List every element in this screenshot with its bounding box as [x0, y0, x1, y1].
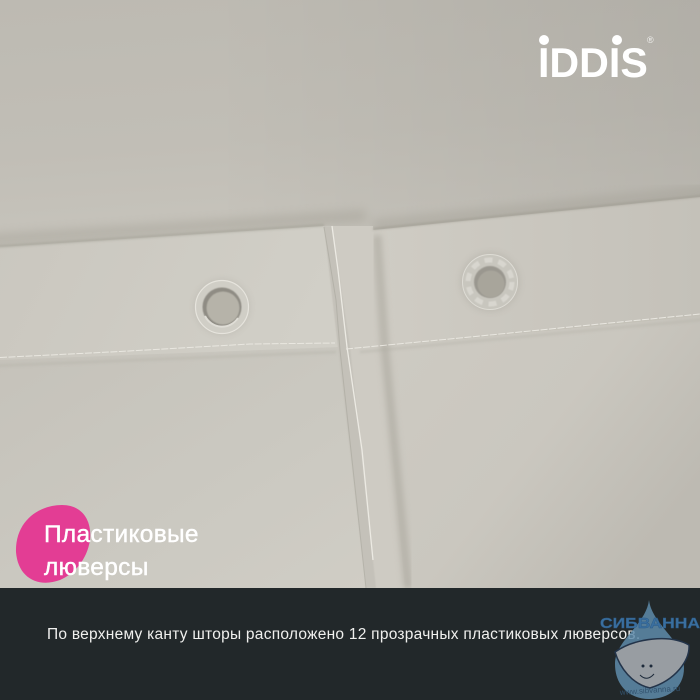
bathtub	[615, 639, 689, 688]
vertical hem strip	[324, 226, 408, 588]
lower right panel	[344, 316, 700, 588]
watermark: Сибванна	[600, 600, 700, 699]
left hem panel	[0, 226, 345, 362]
heading: Пластиковые люверсы: люверсы	[44, 554, 149, 581]
brand name: СИБВАННА	[600, 615, 700, 632]
dark footer bar	[0, 588, 700, 700]
fold shadow lines	[0, 195, 700, 366]
pink blob	[16, 505, 90, 583]
eyelet left	[194, 279, 250, 335]
heading: Пластиковые люверсы	[44, 521, 199, 581]
heading: Пластиковые люверсы: Пластиковые	[44, 521, 199, 548]
stitching lines	[0, 314, 700, 358]
upper curtain panel	[0, 0, 700, 250]
right hem panel	[344, 197, 700, 350]
eyelet right	[460, 252, 520, 312]
logo: IDDIS: IDDIS	[538, 39, 648, 86]
url: www.sibvanna.ru	[619, 684, 680, 697]
water drop	[615, 600, 684, 699]
lower left panel	[0, 347, 378, 588]
logo: IDDIS: ®	[647, 35, 654, 45]
description text: По верхнему канту шторы расположено 12 прозрачных пластиковых люверсов.	[47, 626, 640, 643]
